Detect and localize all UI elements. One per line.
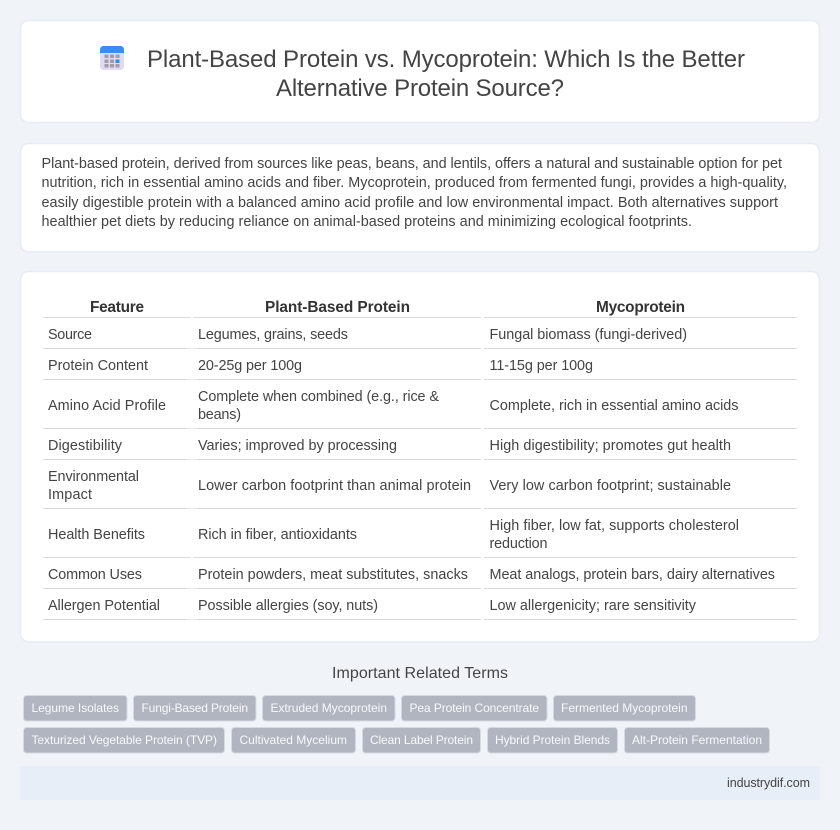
row: allergen potential: Low allergenicity; rare sensitivity — [490, 598, 697, 614]
row: health benefits: High fiber, low fat, supports cholesterol — [490, 518, 739, 534]
tag: Extruded Mycoprotein — [262, 696, 395, 721]
tag: Fermented Mycoprotein — [554, 696, 696, 721]
table header: Plant-Based Protein — [265, 299, 410, 316]
tag: Pea Protein Concentrate: Pea Protein Concentrate — [410, 701, 539, 715]
row: environmental impact: Impact — [48, 487, 92, 503]
tag: Pea Protein Concentrate — [402, 696, 547, 721]
table header — [90, 299, 685, 316]
row: digestibility: High digestibility; promotes gut health — [490, 438, 731, 454]
title: Plant-Based Protein vs. Mycoprotein: Which Is the Better — [147, 46, 745, 73]
table header: Feature — [90, 299, 144, 316]
related term tags — [24, 696, 770, 753]
tag: Cultivated Mycelium — [232, 728, 356, 753]
row: allergen potential: Possible allergies (soy, nuts) — [198, 598, 378, 614]
row: digestibility — [48, 438, 731, 454]
row: protein content — [48, 358, 593, 374]
row: common uses: Common Uses — [48, 567, 142, 583]
row: common uses: Meat analogs, protein bars, dairy alternatives — [490, 567, 775, 583]
tag: Texturized Vegetable Protein (TVP) — [24, 728, 224, 753]
row: protein content: Protein Content — [48, 358, 148, 374]
row: amino acid profile: Complete when combined (e.g., rice & — [198, 389, 439, 405]
row: environmental impact — [48, 469, 731, 503]
row: allergen potential: Allergen Potential — [48, 598, 160, 614]
text block: introduction paragraph: healthier pet diets by reducing reliance on animal-based proteins and minimizing ecological footprints. — [42, 214, 692, 230]
row: environmental impact: Environmental — [48, 469, 139, 485]
row: source: Legumes, grains, seeds — [198, 327, 348, 343]
tag: Fermented Mycoprotein: Fermented Mycoprotein — [561, 701, 688, 715]
tag: Cultivated Mycelium: Cultivated Mycelium — [240, 733, 347, 747]
tag: Legume Isolates — [24, 696, 127, 721]
row: environmental impact: Lower carbon footprint than animal protein — [198, 478, 471, 494]
text block: introduction paragraph: nutrition, rich in essential amino acids and fiber. Mycoprotein, produced from fermented fungi, provides a high-quality, — [42, 175, 787, 191]
row: protein content: 11-15g per 100g — [490, 358, 593, 374]
text block: introduction paragraph: easily digestible protein with a balanced amino acid profile and low environmental impact. Both alternatives support — [42, 195, 778, 211]
row: amino acid profile — [48, 389, 738, 423]
tag: Texturized Vegetable Protein (TVP): Texturized Vegetable Protein (TVP) — [32, 733, 217, 747]
icon: calendar — [100, 46, 124, 70]
tag: Hybrid Protein Blends — [488, 728, 618, 753]
tag: Clean Label Protein — [362, 728, 480, 753]
row: amino acid profile: Complete, rich in essential amino acids — [490, 398, 738, 414]
row: common uses: Protein powders, meat substitutes, snacks — [198, 567, 468, 583]
row: allergen potential — [48, 598, 697, 614]
panel: comparison table — [20, 272, 820, 642]
row: amino acid profile: beans) — [198, 407, 241, 423]
tag: Fungi-Based Protein: Fungi-Based Protein — [142, 701, 248, 715]
footer bar — [20, 766, 820, 800]
tag: Alt-Protein Fermentation: Alt-Protein Fermentation — [632, 733, 762, 747]
text block: introduction paragraph — [42, 156, 787, 230]
footer source text: industrydif.com — [727, 776, 810, 790]
panel: introduction — [20, 144, 820, 252]
row: health benefits: Health Benefits — [48, 527, 145, 543]
tag: Fungi-Based Protein — [134, 696, 256, 721]
tag: Hybrid Protein Blends: Hybrid Protein Blends — [495, 733, 610, 747]
heading: important related terms: Important Related Terms — [332, 665, 508, 682]
text block: introduction paragraph: Plant-based protein, derived from sources like peas, beans, and lentils, offers a natural and sustainable option for pet — [42, 156, 782, 172]
row: amino acid profile: Amino Acid Profile — [48, 398, 166, 414]
row: common uses — [48, 567, 775, 583]
row: health benefits: Rich in fiber, antioxidants — [198, 527, 357, 543]
row: source — [48, 327, 687, 343]
row: health benefits: reduction — [490, 536, 548, 552]
row: protein content: 20-25g per 100g — [198, 358, 302, 374]
tag: Clean Label Protein: Clean Label Protein — [370, 733, 473, 747]
title: Alternative Protein Source? — [276, 75, 564, 102]
row: digestibility: Varies; improved by processing — [198, 438, 397, 454]
table header: Mycoprotein — [596, 299, 685, 316]
tag: Alt-Protein Fermentation — [624, 728, 770, 753]
row: source: Fungal biomass (fungi-derived) — [490, 327, 687, 343]
panel: title card — [20, 20, 820, 122]
row: source: Source — [48, 327, 92, 343]
row: digestibility: Digestibility — [48, 438, 123, 454]
tag: Legume Isolates: Legume Isolates — [32, 701, 119, 715]
row: environmental impact: Very low carbon footprint; sustainable — [490, 478, 731, 494]
tag: Extruded Mycoprotein: Extruded Mycoprotein — [270, 701, 387, 715]
row: health benefits — [48, 518, 739, 552]
title — [147, 46, 745, 102]
